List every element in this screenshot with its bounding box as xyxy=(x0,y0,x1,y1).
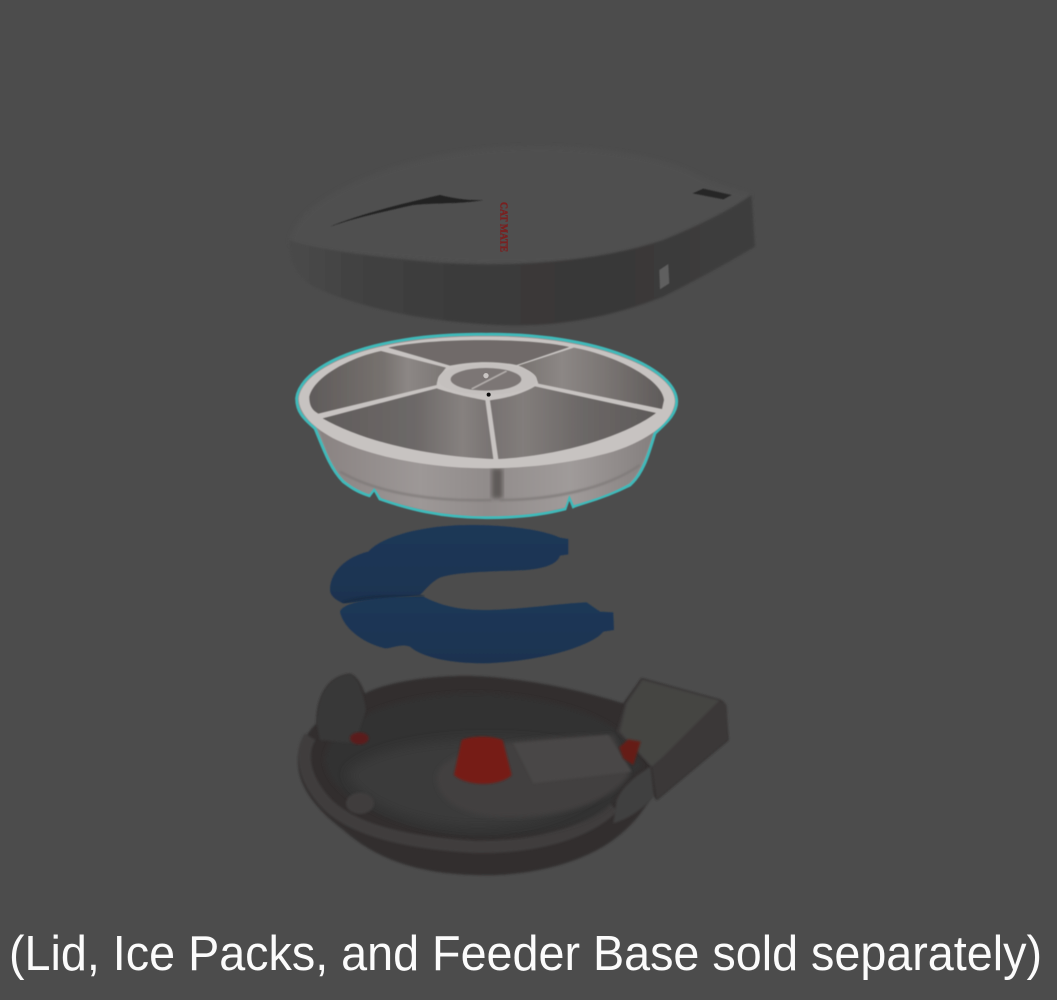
hub opening xyxy=(451,368,521,391)
red centre hub xyxy=(454,737,512,784)
red clip left xyxy=(350,732,369,744)
base front notch xyxy=(613,767,654,823)
compartment: back right xyxy=(518,348,664,409)
hub axle xyxy=(472,371,507,389)
lid top surface xyxy=(290,147,752,264)
lid button xyxy=(659,264,669,289)
compartment: front left xyxy=(323,388,493,459)
centre hub xyxy=(438,364,537,395)
lid brand text: CAT MATE xyxy=(498,202,510,252)
base motor housing xyxy=(617,678,728,800)
hub pin xyxy=(483,373,489,378)
base ribbed plate xyxy=(513,735,632,783)
lid slot xyxy=(330,195,483,227)
lid xyxy=(289,147,755,325)
food tray xyxy=(297,334,677,518)
base back tab xyxy=(317,674,366,743)
tray body lower ledge xyxy=(340,465,640,500)
tray body xyxy=(320,432,653,516)
base centre platform xyxy=(437,735,630,817)
ice packs xyxy=(330,525,614,663)
compartment: back left xyxy=(309,351,446,414)
base inner bowl xyxy=(325,693,643,837)
lid side wall xyxy=(289,195,755,325)
bottom ice pack xyxy=(340,597,614,663)
pack divide shadow xyxy=(343,595,423,602)
tray rim xyxy=(299,336,675,468)
lid window xyxy=(693,189,732,199)
base foot socket xyxy=(346,793,374,814)
base outer shell xyxy=(298,674,728,875)
tray glow outline xyxy=(297,334,677,518)
base left rim highlight xyxy=(305,737,613,847)
hub screw xyxy=(487,393,491,397)
housing top face xyxy=(620,680,719,767)
feeder base xyxy=(298,674,728,875)
top ice pack xyxy=(330,525,568,603)
red connector right xyxy=(619,739,641,765)
tray body centre seam xyxy=(492,468,503,498)
compartment: front right xyxy=(490,386,656,459)
base floor xyxy=(347,739,613,827)
compartment: back xyxy=(388,340,569,366)
